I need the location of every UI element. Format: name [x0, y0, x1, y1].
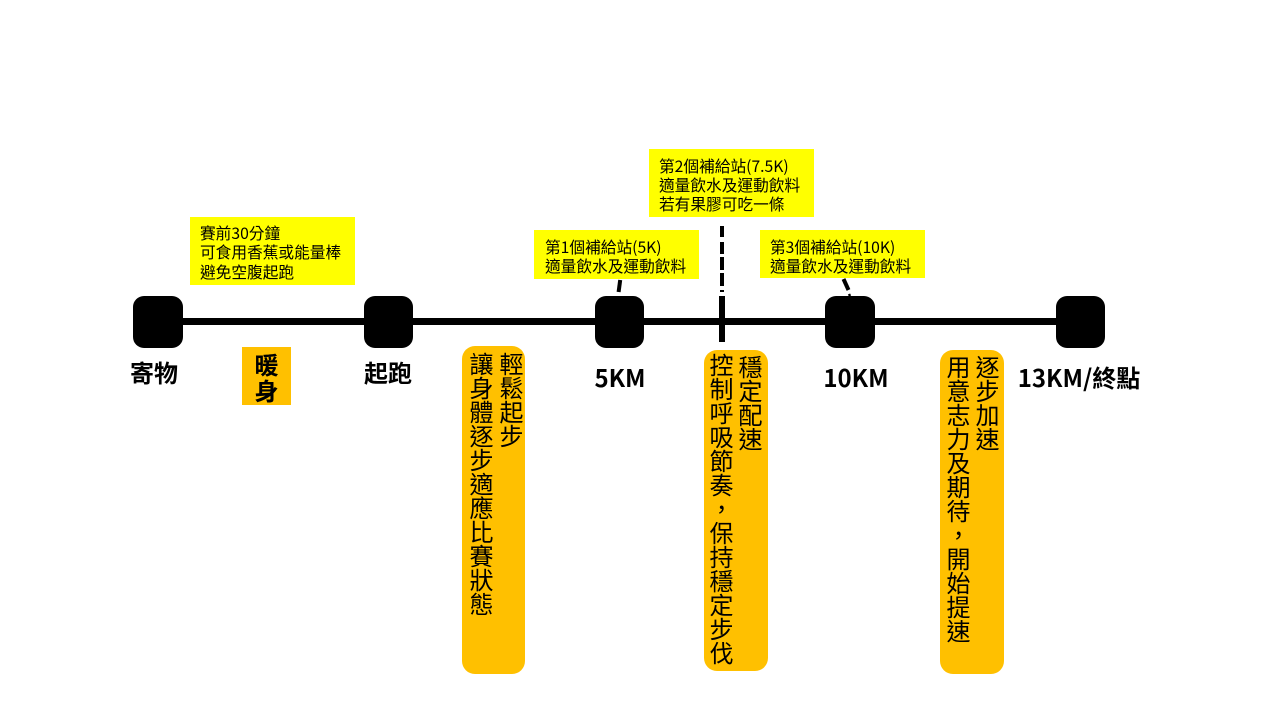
note: aid station 1	[534, 230, 699, 279]
note: aid station 1: 適量飲水及運動飲料	[545, 254, 686, 277]
timeline line	[158, 318, 1080, 324]
note: pre-race food	[190, 217, 355, 285]
pill text: willpower: 用意志力及期待，開始提速	[941, 355, 976, 643]
label: 5KM: 5KM	[594, 359, 646, 394]
phase pill: steady pace	[704, 350, 768, 671]
connector: 10K aid station	[842, 278, 852, 296]
phase box: warm-up	[242, 347, 291, 405]
note: pre-race food: 可食用香蕉或能量棒	[200, 240, 341, 263]
pill text: adapt to race: 讓身體逐步適應比賽狀態	[464, 352, 499, 616]
note: pre-race food: 賽前30分鐘	[200, 221, 280, 244]
marker: 13KM finish	[1056, 296, 1105, 348]
note: aid station 2: 適量飲水及運動飲料	[659, 173, 800, 196]
note: aid station 3: 適量飲水及運動飲料	[770, 254, 911, 277]
pill heading: steady pace: 穩定配速	[733, 355, 768, 451]
label: bag drop: 寄物	[130, 354, 178, 389]
connector: 5K aid station	[616, 280, 622, 292]
marker: 10KM	[825, 296, 875, 348]
phase pill: easy start	[462, 346, 525, 674]
phase box: warm-up: 暖	[254, 346, 278, 381]
phase pill: gradual speed-up	[940, 350, 1004, 674]
label: start: 起跑	[364, 354, 412, 389]
marker: start	[364, 296, 413, 348]
pill heading: easy start: 輕鬆起步	[494, 352, 529, 448]
marker: 5KM	[595, 296, 644, 348]
note: aid station 2: 第2個補給站(7.5K)	[659, 154, 789, 176]
note: aid station 2	[649, 149, 814, 217]
label: 13KM finish: 13KM/終點	[1018, 359, 1140, 394]
note: aid station 3	[760, 230, 925, 278]
pill text: control breathing: 控制呼吸節奏，保持穩定步伐	[704, 353, 739, 665]
marker: bag drop	[133, 296, 183, 348]
note: aid station 1: 第1個補給站(5K)	[545, 235, 662, 258]
note: aid station 2: 若有果膠可吃一條	[659, 192, 784, 215]
pill heading: gradual speed-up: 逐步加速	[970, 355, 1005, 451]
connector: 7.5K aid station	[719, 226, 725, 342]
phase box: warm-up: 身	[254, 372, 278, 407]
note: aid station 3: 第3個補給站(10K)	[770, 235, 895, 258]
note: pre-race food: 避免空腹起跑	[200, 260, 294, 283]
label: 10KM: 10KM	[823, 359, 889, 394]
